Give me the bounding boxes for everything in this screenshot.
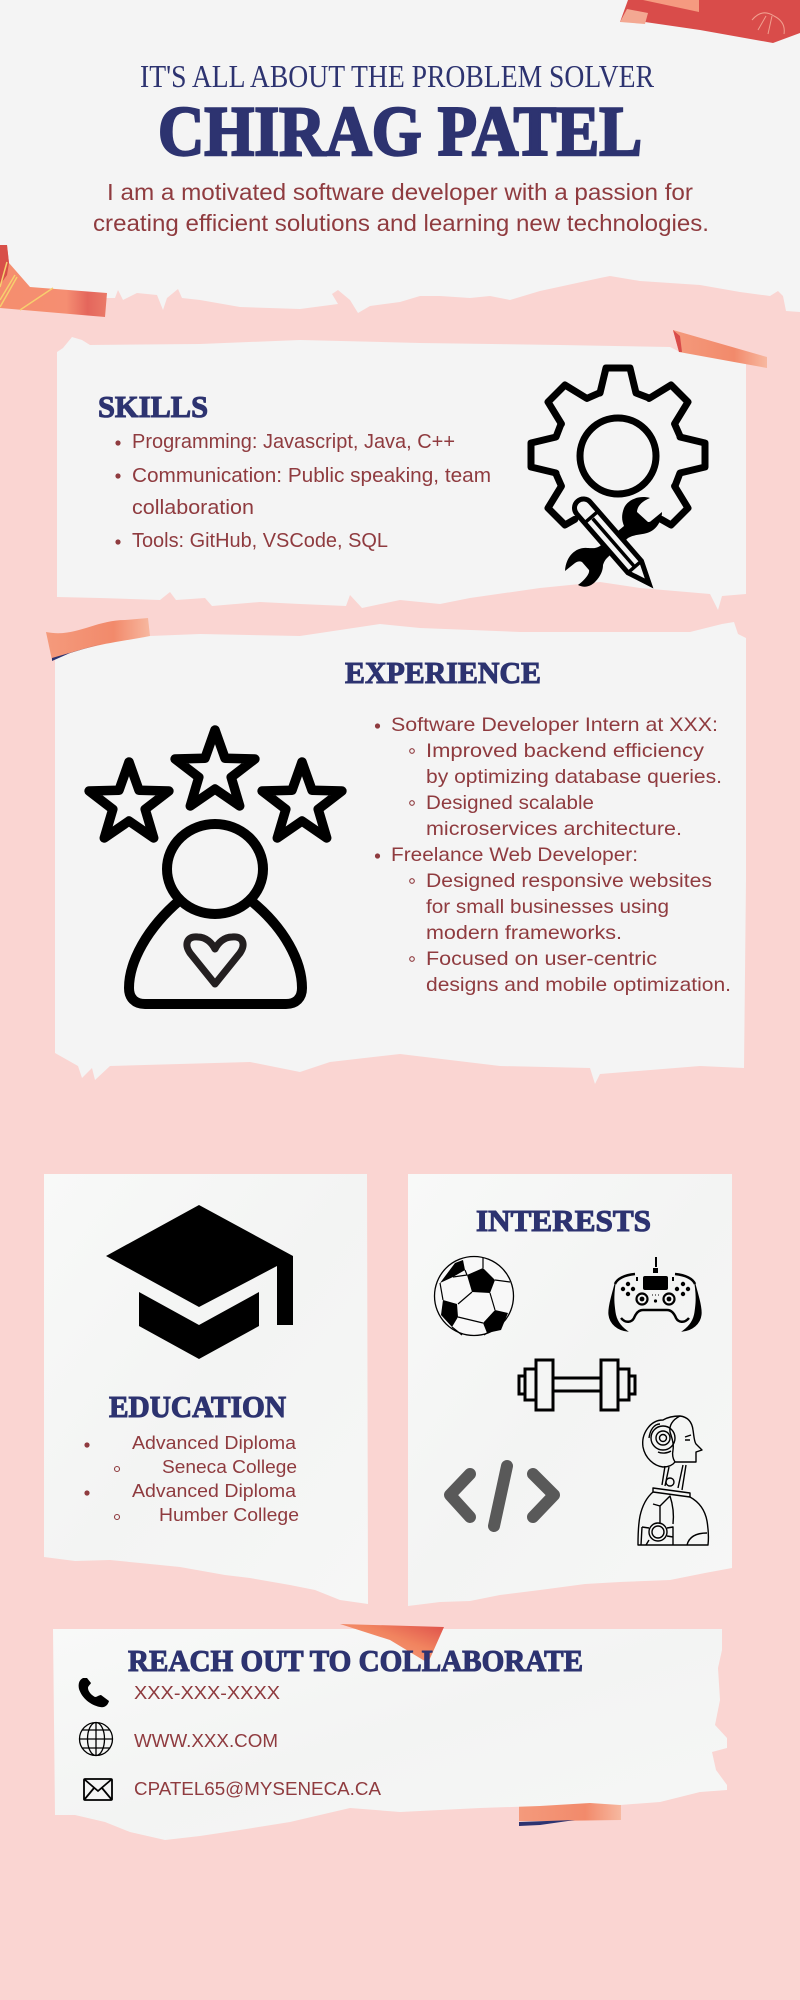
education list: Advanced Diploma [132,1480,297,1501]
skills list [115,431,491,552]
experience list: designs and mobile optimization. [426,974,731,996]
experience list [375,714,731,996]
tape: left [0,245,107,317]
skills list: Tools: GitHub, VSCode, SQL [132,530,388,552]
tape: top right [620,0,800,43]
experience list: modern frameworks. [426,922,622,944]
experience list: Freelance Web Developer: [391,844,638,866]
experience list: Software Developer Intern at XXX: [391,714,718,736]
contact paper [53,1629,727,1840]
experience list: Improved backend efficiency [426,740,704,762]
icon: graduation cap [106,1205,293,1359]
contact: website: WWW.XXX.COM [134,1731,278,1751]
intro text [93,179,709,236]
education heading: EDUCATION [109,1389,286,1424]
tape: skills top right [673,330,767,368]
skills heading: SKILLS [98,389,208,424]
experience list: microservices architecture. [426,818,682,840]
icon: gear with wrench and pencil [531,368,705,590]
contact: phone number: XXX-XXX-XXXX [134,1683,280,1703]
name heading: CHIRAG PATEL [158,93,642,171]
panel: experience [55,622,746,1084]
skills list: collaboration [132,497,254,519]
icon: robot [638,1416,708,1545]
skills list: Communication: Public speaking, team [132,465,491,487]
icon: globe [80,1722,112,1756]
icon: dumbbell [519,1360,635,1410]
education list: Humber College [159,1504,299,1525]
panel: interests [408,1174,732,1606]
icon: phone [79,1678,109,1707]
contact: email: CPATEL65@MYSENECA.CA [134,1779,381,1799]
experience list: Focused on user-centric [426,948,657,970]
skills paper [57,337,746,610]
experience list: for small businesses using [426,896,669,918]
education paper [44,1174,368,1604]
education list: Seneca College [162,1456,297,1477]
icon: game controller [609,1257,701,1331]
header torn paper band [0,0,800,313]
contact heading: REACH OUT TO COLLABORATE [128,1643,583,1678]
icon: soccer ball [434,1256,514,1336]
tape: contact top [340,1624,444,1663]
experience list: Designed responsive websites [426,870,712,892]
skills list: Programming: Javascript, Java, C++ [132,431,455,453]
icon: person with stars and heart [89,730,342,1004]
panel: skills [57,337,746,610]
intro text: creating efficient solutions and learning new technologies. [93,210,709,236]
panel: contact [53,1624,727,1840]
interests heading: INTERESTS [476,1203,651,1238]
tape: experience [46,618,150,661]
panel: education [44,1174,368,1604]
intro text: I am a motivated software developer with a passion for [107,179,693,205]
experience paper [55,622,746,1084]
interests paper [408,1174,732,1606]
icon: code brackets [450,1466,554,1526]
title block [93,58,709,236]
subtitle: IT'S ALL ABOUT THE PROBLEM SOLVER [140,58,655,94]
experience heading: EXPERIENCE [345,655,541,690]
icon: envelope [84,1779,112,1800]
education list [84,1432,299,1525]
education list: Advanced Diploma [132,1432,297,1453]
tape: contact bottom [519,1800,621,1826]
experience list: by optimizing database queries. [426,766,722,788]
experience list: Designed scalable [426,792,594,814]
